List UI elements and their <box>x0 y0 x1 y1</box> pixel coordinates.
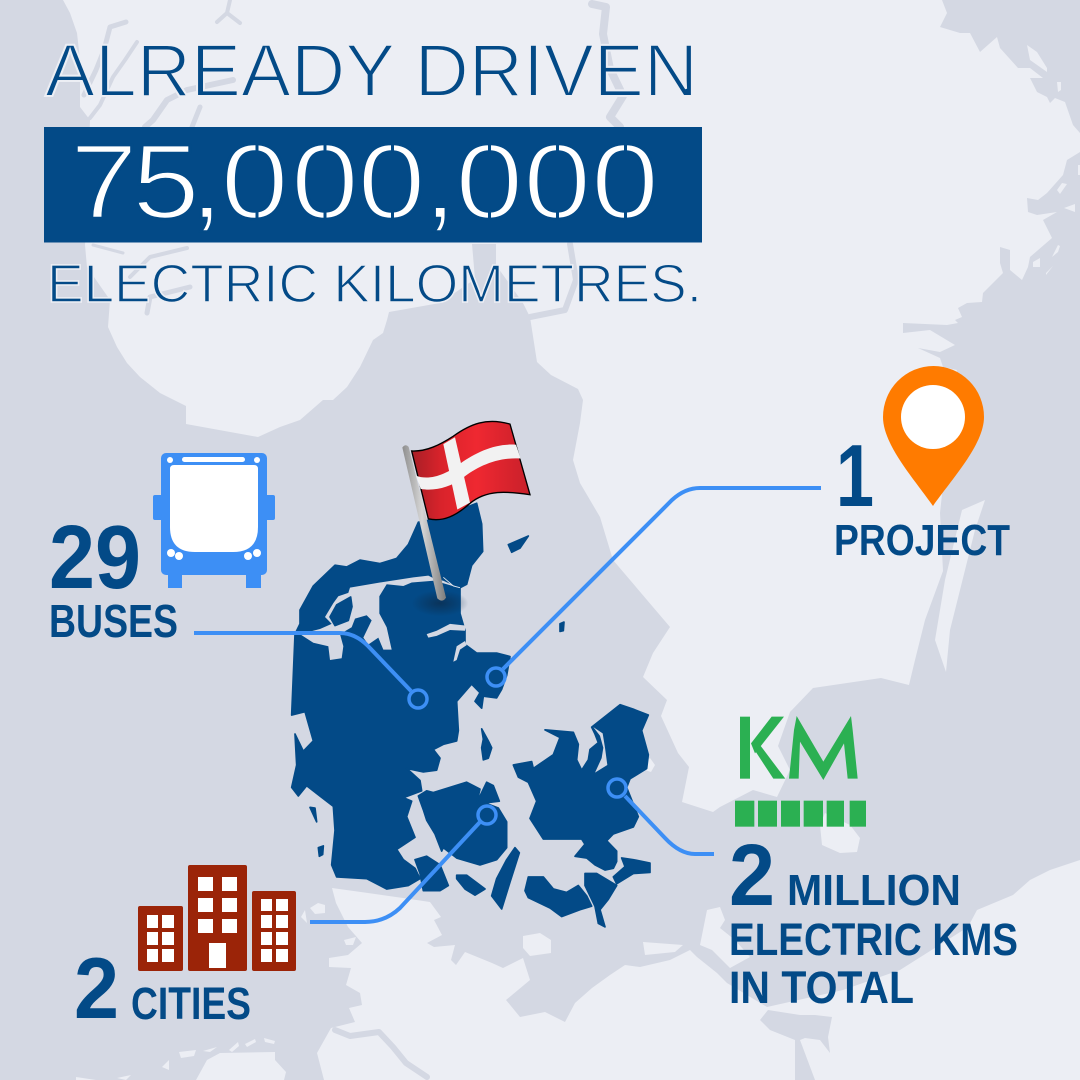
Funen <box>418 782 507 865</box>
icon: bus <box>153 453 275 588</box>
stat: 2 cities: 2 <box>74 941 119 1037</box>
map of Denmark <box>292 503 650 927</box>
stat: 2 cities: CITIES <box>131 978 251 1029</box>
headline number bar: 75,000,000 <box>70 123 659 241</box>
title line 3: ELECTRIC KILOMETRES. <box>47 254 702 314</box>
icon: Danish flag <box>402 421 530 616</box>
Fano <box>310 807 317 822</box>
Langeland <box>492 848 519 909</box>
connector: project <box>487 488 821 686</box>
stat: 29 buses <box>49 508 178 647</box>
stat: 2 million electric kms in total: IN TOTAL <box>729 962 914 1013</box>
Romo <box>318 846 323 856</box>
connector: cities <box>310 806 496 922</box>
Falster <box>585 873 617 927</box>
stat: 29 buses: 29 <box>49 508 141 608</box>
Als <box>415 856 448 891</box>
stat: 2 million electric kms in total: 2 <box>729 827 775 924</box>
Limfjord water <box>300 576 467 662</box>
title line 1: ALREADY DRIVEN <box>45 29 698 112</box>
stat: 2 million electric kms in total: ELECTRIC KMS <box>729 914 1018 965</box>
Jutland <box>292 503 510 889</box>
Samso <box>482 729 492 760</box>
Mon <box>613 858 650 884</box>
stat: 1 project <box>834 426 1010 565</box>
stat: 1 project: 1 <box>836 426 874 525</box>
Zealand <box>513 705 648 870</box>
stat: 2 million electric kms in total: MILLION <box>787 866 961 915</box>
stat: 1 project: PROJECT <box>834 516 1010 565</box>
connector: kilometres <box>608 779 714 854</box>
Laeso <box>508 536 528 552</box>
icon: location pin <box>883 366 984 506</box>
icon: KM road <box>735 716 866 827</box>
stat: 2 million electric kms in total <box>729 827 1018 1013</box>
connector: buses <box>194 633 427 708</box>
Anholt <box>560 622 564 631</box>
Aero <box>457 875 485 895</box>
stat: 2 cities <box>74 941 251 1037</box>
stat: 29 buses: BUSES <box>49 595 178 647</box>
icon: buildings <box>138 865 296 971</box>
Lolland <box>525 877 592 917</box>
